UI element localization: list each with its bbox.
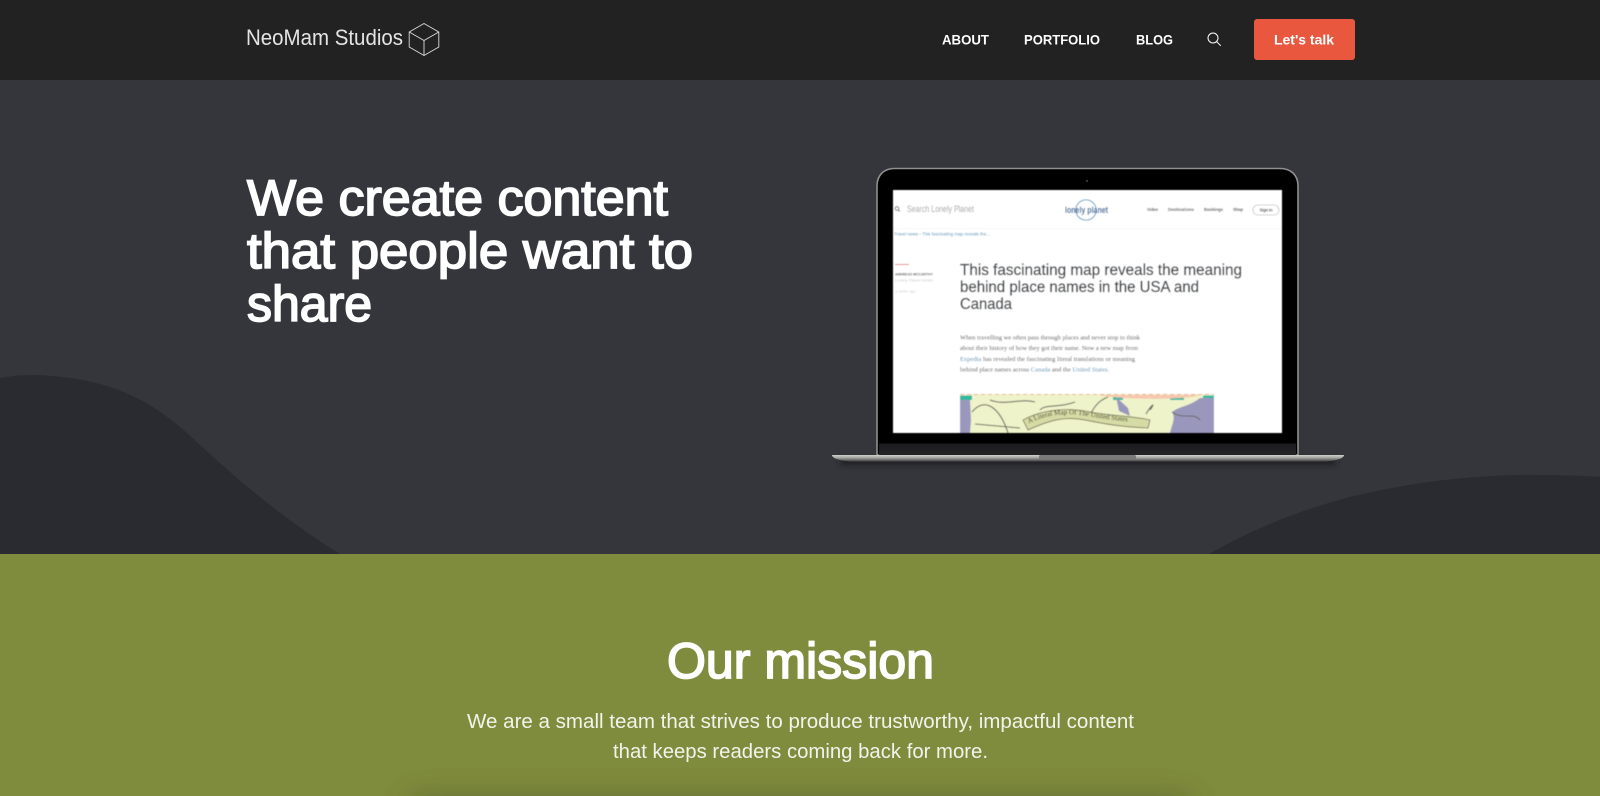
logo: NeoMam Studios [246, 24, 439, 56]
laptop chin [879, 433, 1296, 455]
icon: cube [409, 24, 439, 56]
article title: This fascinating map reveals the meaning [960, 262, 1242, 279]
lonely planet logo: lonely planet [1065, 205, 1109, 216]
article paragraph: When travelling we often pass through places and never stop to think [960, 334, 1141, 342]
mission text [467, 711, 1134, 763]
laptop base [832, 455, 1344, 462]
hero wave: right [1209, 475, 1600, 554]
site menu: Bookings [1204, 207, 1224, 212]
panel: navigation bar [0, 0, 1600, 80]
laptop camera [1086, 180, 1088, 182]
site menu: Sign in [1260, 208, 1273, 212]
panel: our mission [0, 554, 1600, 796]
article paragraph: about their history of how they got their name. Now a new map from [960, 345, 1138, 352]
article title: behind place names in the USA and [960, 279, 1199, 296]
mission text: that keeps readers coming back for more. [613, 741, 988, 763]
literal map image: A Literal Map Of The United States [1028, 410, 1128, 424]
hero heading [247, 170, 693, 332]
button: let's talk [1254, 19, 1355, 60]
laptop screen: article page [892, 189, 1283, 434]
site search: Search Lonely Planet [907, 204, 974, 215]
icon: search [1208, 33, 1221, 46]
article title [960, 262, 1242, 313]
nav link: portfolio: PORTFOLIO [1024, 32, 1100, 48]
laptop lid [877, 168, 1298, 455]
nav link: about: ABOUT [942, 32, 989, 48]
literal map image [959, 394, 1215, 434]
header divider [893, 228, 1282, 230]
hero heading: We create content [247, 170, 668, 226]
laptop mockup [832, 168, 1344, 468]
article paragraph: Expedia has revealed the fascinating literal translations or meaning [960, 356, 1136, 363]
author sidebar [895, 264, 934, 294]
button: let's talk: Let's talk [1274, 32, 1334, 48]
author sidebar: a while ago [895, 290, 916, 294]
hero heading: share [247, 276, 372, 332]
site menu [1147, 205, 1279, 215]
author sidebar: Lonely Planet Writer [895, 278, 934, 282]
logo wordmark: NeoMam Studios [246, 25, 403, 50]
site menu: Video [1147, 207, 1158, 212]
mission heading: Our mission [667, 633, 934, 689]
author sidebar: ANDREAS MCCARTHY [895, 272, 934, 276]
panel: hero background [0, 80, 1600, 554]
laptop shadow [840, 459, 1336, 465]
nav link: blog: BLOG [1136, 32, 1173, 48]
hero heading: that people want to [247, 223, 693, 279]
site menu: Shop [1233, 207, 1243, 212]
site menu: Destinations [1168, 207, 1195, 212]
mission text: We are a small team that strives to produce trustworthy, impactful content [467, 711, 1134, 733]
laptop hinge notch [1039, 455, 1136, 460]
lonely planet logo [1065, 200, 1109, 220]
article paragraph: behind place names across Canada and the United States. [960, 366, 1109, 374]
site search [895, 204, 974, 215]
hero wave: left [0, 375, 340, 554]
article title: Canada [960, 296, 1012, 313]
breadcrumb: Travel news › This fascinating map reveals the... [894, 232, 990, 236]
article paragraph [960, 334, 1141, 374]
